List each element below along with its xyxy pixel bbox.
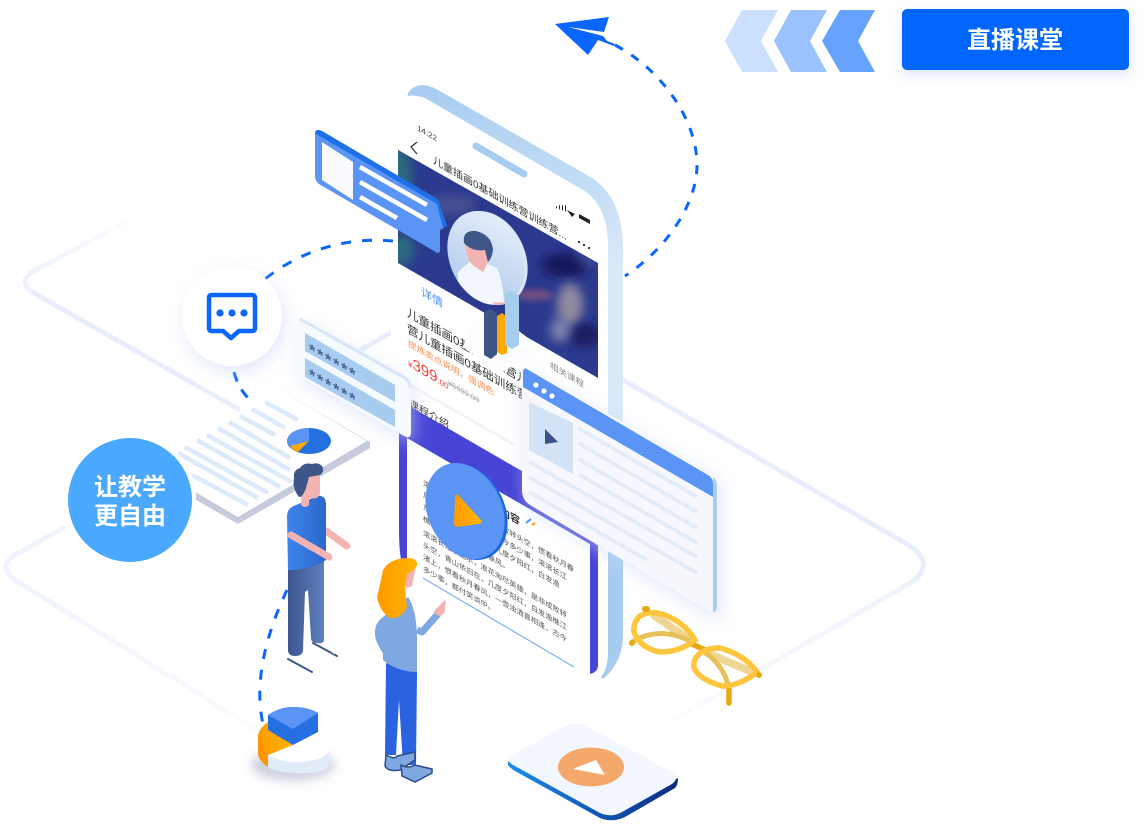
speaker pill (476, 146, 524, 174)
chevrons (725, 10, 875, 72)
3d bars (484, 291, 519, 359)
button: live classroom (902, 9, 1129, 70)
man figure (287, 463, 347, 672)
content card (407, 438, 590, 674)
glasses temples (652, 614, 752, 672)
card underline (423, 578, 574, 667)
card paragraph: 樵江渚上，惯看秋月春风。 (423, 514, 509, 573)
dashed path: bubble to document (234, 372, 250, 400)
purple header (407, 412, 590, 546)
chart platform (463, 318, 543, 373)
document stripes (178, 402, 298, 505)
floating blue card (315, 130, 447, 253)
label circle: teach more freely: 让教学 (94, 474, 166, 501)
tablet play circle (558, 748, 624, 786)
man trousers (288, 558, 324, 656)
masked text (309, 339, 357, 410)
bubble circle (182, 266, 282, 366)
card paragraph: 滚滚长江东逝水，浪花淘尽英雄，是非成败转 (423, 528, 567, 620)
dashed path: card to bubble (265, 240, 393, 279)
masked text: ****** (309, 364, 357, 410)
woman legs (385, 663, 417, 765)
tablet with play button (508, 724, 678, 820)
course title: 营儿童插画0基础训练营 (407, 321, 528, 405)
pie orange slice (258, 722, 293, 767)
accent mark orange (532, 523, 535, 525)
window text lines (529, 428, 697, 573)
status time: 14:22 (417, 123, 437, 143)
button: live classroom: 直播课堂 (967, 27, 1063, 54)
card paragraph: 渚上，惯看秋月春风，一壶浊酒喜相逢，古今 (423, 552, 567, 644)
woman torso (383, 597, 417, 672)
related label: 相关课程 (550, 360, 584, 389)
section heading: 课程介绍 (409, 396, 449, 432)
page title: 儿童插画0基础训练营训练营... (433, 153, 567, 243)
tab label: 详情 (421, 285, 443, 311)
card paragraph: 多少事，都付笑谈中。 (423, 564, 495, 614)
woman hand (434, 600, 446, 616)
card heading: 课程内容 (480, 492, 520, 528)
card paragraph: 滚滚长江东逝水，是非成败转头空，惯看秋月春 (423, 478, 574, 574)
glasses bridge (692, 644, 729, 703)
glasses frames (634, 613, 757, 686)
pie blue slice (268, 707, 318, 745)
document pie chart (287, 428, 331, 454)
glasses (632, 609, 759, 703)
window thumbnail (529, 402, 573, 474)
selling point: 提炼卖点说明，强调色 (408, 338, 494, 397)
man front arm (291, 535, 329, 557)
document sheet (172, 390, 370, 524)
back arrow (411, 142, 417, 154)
phone screen (391, 96, 608, 682)
window dots (533, 382, 555, 399)
pie shadow (251, 749, 335, 781)
card paragraph: 东逝水，青山依旧在，几度夕阳红，白发渔 (423, 502, 560, 590)
accent marks (526, 519, 531, 523)
phone shell (408, 85, 623, 679)
thumbnail play icon (545, 429, 558, 444)
woman figure (375, 558, 446, 782)
icon: chat bubble (209, 295, 255, 338)
glasses temple arcs (632, 634, 729, 690)
man neck and head (301, 474, 320, 507)
background: isometric outline rhombuses (6, 222, 924, 735)
woman shoes (385, 752, 415, 770)
password card (297, 317, 411, 437)
phone (388, 85, 623, 682)
card paragraph: 风。一壶浊酒喜相逢，古今多少事，滚滚长江 (423, 490, 567, 582)
avatar disc (447, 211, 528, 305)
dashed path: plane to phone (615, 45, 697, 276)
man back arm (326, 531, 347, 546)
play disc (410, 450, 523, 573)
price: ¥399.00 (407, 353, 449, 393)
old price: ¥5699.00 (447, 378, 480, 405)
divider band (410, 385, 515, 445)
label circle: teach more freely (64, 434, 196, 566)
avatar person (458, 231, 507, 306)
dashed path: man to pie (260, 590, 287, 724)
man shirt (287, 496, 326, 570)
play triangle (454, 494, 482, 527)
course title: 儿童插画0基础训练营儿童插 (407, 305, 551, 402)
woman arm (417, 614, 438, 632)
video banner (388, 146, 604, 378)
woman face (406, 566, 416, 588)
card paragraph (423, 478, 574, 644)
icon: paper plane (555, 17, 615, 55)
man hair (294, 463, 323, 497)
label circle: teach more freely: 更自由 (94, 503, 166, 530)
masked text: ****** (309, 339, 357, 385)
card paragraph: 头空，青山依旧在，几度夕阳红，白发渔樵江 (423, 540, 567, 632)
course window (522, 367, 718, 613)
status icons (556, 205, 590, 249)
purple section frame (399, 400, 598, 674)
pie white slice (268, 730, 329, 773)
glasses hinges (632, 609, 759, 675)
woman hair (377, 558, 417, 618)
3d pie chart (251, 707, 335, 781)
tablet play triangle (573, 760, 605, 775)
man shoes (288, 643, 337, 672)
